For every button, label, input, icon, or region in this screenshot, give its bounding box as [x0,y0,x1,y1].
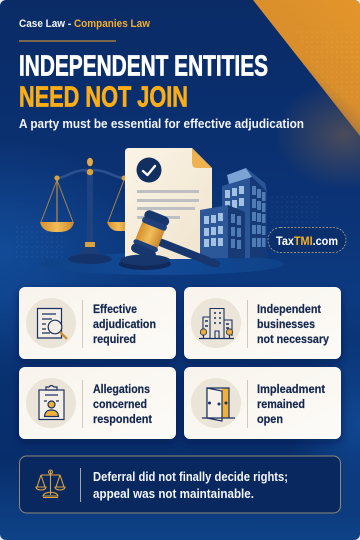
illustration: legal hero [40,148,284,275]
badge: TaxTMI.com: TaxTMI.com [276,234,338,248]
gold corner triangle [253,0,360,136]
subtitle: A party must be essential for effective adjudication [19,117,304,131]
panel: effective adjudication required: adjudication [93,317,156,331]
icon: office buildings [200,168,267,258]
panel: independent businesses not necessary: businesses [257,317,315,331]
icon: balance scale [40,158,130,264]
icon: open door [202,388,235,421]
panel: impleadment remained open [184,367,341,439]
icon: city buildings [199,308,234,338]
text: conclusion: Deferral did not finally decide rights; [93,470,288,484]
text: conclusion [93,470,288,501]
panel: effective adjudication required: required [93,332,136,346]
badge: TaxTMI.com [268,228,346,252]
panel: impleadment remained open: open [257,412,283,426]
panel: allegations concerned respondent: concerned [93,397,147,411]
panel: independent businesses not necessary: Independent [257,302,321,316]
text: conclusion: appeal was not maintainable. [93,487,254,501]
panel: effective adjudication required: Effective [93,302,137,316]
panel: independent businesses not necessary [184,287,341,359]
icon: document with check [125,148,212,259]
category label: Case Law - Companies Law [19,18,150,30]
panel: conclusion callout [20,456,340,513]
panel: effective adjudication required [19,287,176,359]
platform [40,253,284,275]
icon: document with magnifier [38,308,67,339]
panel: allegations concerned respondent: Allegations [93,382,150,396]
panel: independent businesses not necessary: not necessary [257,332,329,346]
panel: allegations concerned respondent: respondent [93,412,152,426]
icon: gavel [119,209,220,270]
icon: clipboard with person [39,386,64,420]
panel: allegations concerned respondent [19,367,176,439]
panel: impleadment remained open: remained [257,397,305,411]
title [20,54,268,108]
title: NEED NOT JOIN [19,82,188,114]
panel: impleadment remained open: Impleadment [257,382,325,396]
icon: gold scales [36,470,65,498]
title: INDEPENDENT ENTITIES [19,50,268,82]
